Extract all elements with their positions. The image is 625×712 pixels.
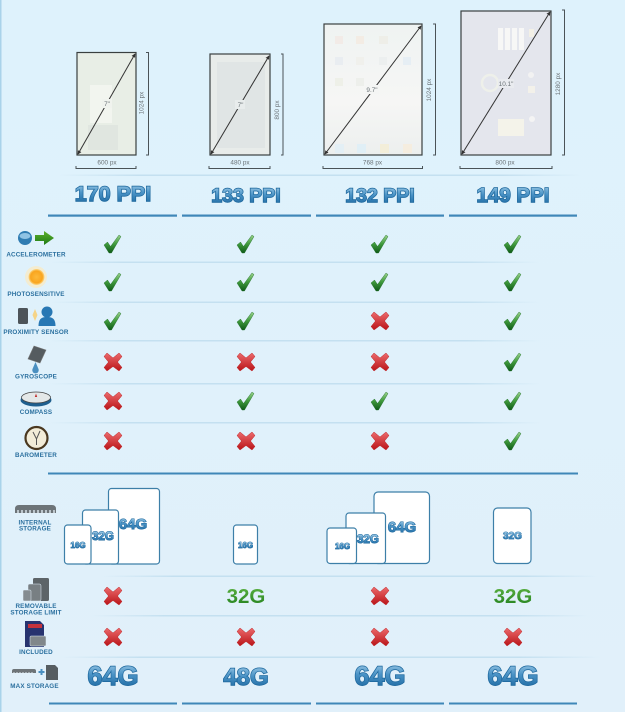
device 4: 10.1 inch 800x1280: 10.1" (499, 81, 513, 88)
device 2: 7 inch 480x800 (209, 54, 283, 168)
row: removable storage limit: 32G (227, 585, 265, 608)
icon: accelerometer (18, 231, 54, 245)
icon: phone and person (18, 306, 56, 326)
device 2: 7 inch 480x800: 800 px (274, 100, 281, 120)
column 1 storage tablets (64, 488, 160, 564)
column 3 storage tablets: 64G (388, 519, 416, 536)
device 1: 7 inch 600x1024: 7" (104, 101, 110, 108)
device 4: 10.1 inch 800x1280: 1280 px (555, 72, 562, 95)
row: accelerometer (6, 231, 521, 258)
icon: sun (25, 266, 47, 288)
row: max storage (10, 661, 539, 691)
PPI values row: 133 PPI (211, 185, 281, 207)
device 2: 7 inch 480x800: 7" (238, 102, 243, 109)
column 3 storage tablets: 16G (335, 542, 350, 551)
column 1 storage tablets: 16G (70, 541, 86, 550)
icon: chip plus card (12, 665, 58, 680)
row: max storage: 64G (87, 661, 139, 691)
PPI values row: 149 PPI (477, 184, 549, 207)
icon: stacked devices (23, 578, 49, 601)
row: photosensitive: PHOTOSENSITIVE (7, 291, 65, 298)
column 1 storage tablets: 64G (119, 516, 147, 533)
row: gyroscope: GYROSCOPE (15, 374, 57, 380)
row: internal storage: STORAGE (19, 526, 51, 532)
PPI values row: 132 PPI (345, 185, 415, 207)
row: included (19, 621, 522, 656)
device 1: 7 inch 600x1024: 600 px (97, 160, 117, 166)
row: removable storage limit (10, 578, 532, 616)
row: compass (20, 392, 521, 416)
PPI values row (75, 182, 549, 207)
row: barometer: BAROMETER (15, 452, 57, 459)
row: gyroscope (15, 346, 521, 380)
device 3: 9.7 inch 768x1024: 768 px (363, 160, 383, 166)
row: max storage: 64G (487, 661, 539, 691)
row: accelerometer: ACCELEROMETER (6, 252, 66, 258)
column 4 storage tablet (494, 508, 531, 564)
row: max storage: 48G (223, 664, 269, 691)
device 3: 9.7 inch 768x1024: 9.7" (366, 87, 378, 94)
PPI values row: 170 PPI (75, 182, 151, 206)
device 4: 10.1 inch 800x1280 (460, 10, 564, 168)
row: removable storage limit: REMOVABLE (15, 603, 57, 610)
row: barometer (15, 427, 521, 459)
row: internal storage (15, 488, 531, 564)
column 2 storage tablet: 16G (238, 541, 253, 550)
row: included: INCLUDED (19, 649, 53, 656)
icon: barometer (26, 427, 48, 449)
row: removable storage limit: 32G (494, 585, 532, 608)
row: internal storage: INTERNAL (18, 520, 52, 526)
icon: memory cards (25, 621, 46, 647)
row: compass: COMPASS (20, 409, 52, 416)
column 4 storage tablet: 32G (503, 531, 522, 542)
device 2: 7 inch 480x800: 480 px (230, 160, 250, 166)
device 4: 10.1 inch 800x1280: 800 px (495, 160, 515, 166)
column 1 storage tablets: 32G (92, 531, 114, 543)
row: photosensitive (7, 266, 521, 298)
row: max storage: MAX STORAGE (10, 683, 59, 690)
device 1: 7 inch 600x1024: 1024 px (138, 91, 146, 114)
column 2 storage tablet (234, 525, 258, 564)
device 3: 9.7 inch 768x1024 (323, 24, 436, 168)
row: proximity sensor: PROXIMITY SENSOR (3, 329, 69, 336)
device 3: 9.7 inch 768x1024: 1024 px (426, 78, 433, 101)
icon: gyroscope (28, 346, 46, 373)
row: removable storage limit: STORAGE LIMIT (10, 610, 62, 616)
row: proximity sensor (3, 306, 521, 336)
icon: memory chip (15, 505, 56, 514)
column 3 storage tablets: 32G (357, 534, 379, 546)
icon: compass (20, 392, 52, 406)
row: max storage: 64G (354, 661, 406, 691)
column 3 storage tablets (327, 492, 430, 564)
device 1: 7 inch 600x1024 (76, 52, 148, 168)
